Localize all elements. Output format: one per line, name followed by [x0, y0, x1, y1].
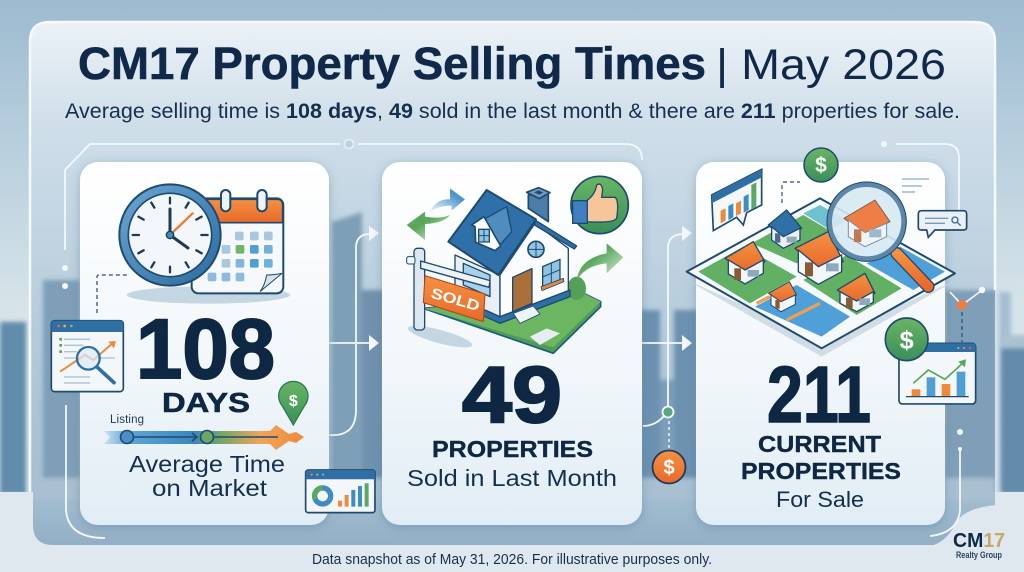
icon: thumbs up: [571, 176, 628, 234]
connector lines and arrows: [62, 140, 963, 538]
small house blue: [768, 210, 802, 248]
magnifier: [897, 253, 928, 287]
text lines decoration: [902, 179, 929, 192]
logo: CM17: [953, 530, 1005, 552]
label for sale: For Sale: [776, 487, 864, 512]
house small: [769, 282, 797, 312]
icon: clock and calendar: [118, 183, 290, 304]
icon: dashboard window: [306, 470, 375, 513]
dashed connector: [782, 182, 800, 203]
label average time on market: Average Time: [129, 451, 285, 477]
icon: location pin: [279, 381, 308, 425]
big number 49: 49: [462, 350, 562, 439]
icon: growth chart window: [885, 318, 976, 404]
icon: swap arrows: [407, 188, 623, 280]
icon: node connector: [950, 287, 985, 342]
panel: average time on market: on Market: [152, 475, 268, 501]
icon: dollar coin: [652, 450, 686, 484]
subtitle: Average selling time is 108 days, 49 sold in the last month & there are 211 properties for sale.: [65, 100, 960, 123]
panel: average time on market: [80, 162, 329, 525]
footer note: Data snapshot as of May 31, 2026. For illustrative purposes only.: [312, 552, 712, 568]
outer city buildings: [0, 292, 1024, 494]
icon: dollar coin: $: [663, 457, 675, 479]
big number 211: 211: [767, 350, 871, 439]
label listing: Listing: [110, 414, 144, 426]
house right: [837, 273, 875, 312]
icon: search analytics window: [51, 321, 123, 392]
label properties: PROPERTIES: [432, 436, 593, 462]
icon: dollar coin top: [804, 148, 838, 182]
title date: | May 2026: [716, 41, 946, 89]
label sold in last month: Sold in Last Month: [407, 465, 617, 491]
bottom strip: [0, 492, 1024, 572]
label current: CURRENT: [758, 431, 882, 457]
panel: current properties: [696, 162, 945, 525]
icon: sold house: SOLD: [429, 286, 481, 315]
icon: dollar coin top: $: [815, 154, 827, 177]
timeline arrow: [104, 425, 304, 450]
icon: property map: [687, 182, 957, 357]
big number 108: 108: [136, 302, 275, 396]
icon: growth chart window: $: [900, 326, 914, 354]
logo corner backdrop: [930, 492, 1024, 572]
icon: search speech bubble: [918, 211, 967, 237]
blurred city skyline: [33, 212, 997, 500]
label properties: PROPERTIES: [741, 458, 901, 484]
title: CM17 Property Selling Times: [78, 38, 706, 89]
label DAYS: DAYS: [162, 387, 250, 418]
house big: [795, 232, 843, 284]
icon: location pin: $: [289, 393, 298, 410]
icon: tilted chart window: [712, 169, 762, 231]
icon: sold house: [406, 188, 601, 353]
panel: properties sold: [382, 162, 642, 525]
dashed connector: [97, 275, 127, 313]
house orange: [725, 242, 765, 284]
logo: Realty Group: [956, 550, 1002, 560]
frame white border: [30, 22, 995, 492]
